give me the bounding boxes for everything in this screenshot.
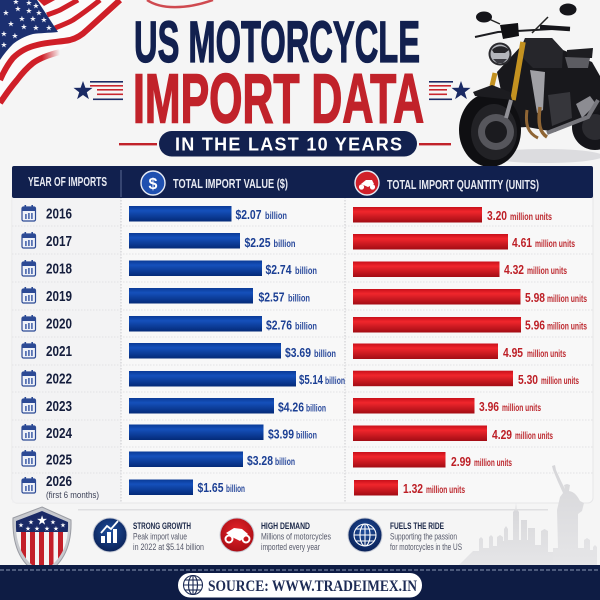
feature: fuels the ride: FUELS THE RIDE bbox=[390, 521, 444, 532]
row 2026: billion bbox=[226, 484, 245, 495]
icon: shield: ★ bbox=[19, 522, 25, 529]
source pill: SOURCE: WWW.TRADEIMEX.IN bbox=[208, 578, 417, 595]
table header: $ bbox=[149, 176, 158, 193]
row 2022 bbox=[22, 370, 579, 388]
skyline and Statue of Liberty bbox=[458, 465, 597, 566]
row 2022: billion bbox=[325, 376, 345, 387]
icon: shield: ★ bbox=[54, 526, 60, 532]
footer band bbox=[0, 565, 600, 600]
row 2026 bbox=[22, 473, 465, 500]
row 2019: billion bbox=[288, 294, 310, 304]
row 2026: (first 6 months) bbox=[46, 490, 99, 500]
table header: YEAR OF IMPORTS bbox=[28, 175, 107, 189]
divider above features bbox=[78, 509, 548, 510]
subtitle pill: IN THE LAST 10 YEARS bbox=[175, 134, 402, 154]
row 2021: million units bbox=[527, 349, 566, 360]
row 2025: 2025 bbox=[46, 452, 72, 468]
row 2016 bbox=[22, 205, 552, 223]
icon: American flag corner: ★ bbox=[3, 9, 10, 17]
feature: high demand: imported every year bbox=[261, 542, 320, 552]
table header: TOTAL IMPORT VALUE ($) bbox=[173, 177, 288, 191]
row 2026: 2026 bbox=[46, 473, 72, 490]
row 2023: 2023 bbox=[46, 398, 72, 415]
feature: strong growth: Peak import value bbox=[133, 532, 187, 542]
row 2021: 4.95 bbox=[503, 346, 523, 360]
row 2024: million units bbox=[515, 431, 553, 442]
icon: shield: ★ bbox=[45, 526, 51, 532]
row 2018 bbox=[22, 260, 567, 278]
row 2020 bbox=[22, 315, 587, 332]
row 2023: $4.26 bbox=[278, 400, 304, 414]
row 2026: million units bbox=[426, 485, 465, 496]
row 2020: 2020 bbox=[46, 316, 72, 332]
row 2019: 2019 bbox=[46, 288, 72, 305]
right star decoration bbox=[429, 81, 470, 100]
row 2016: $2.07 bbox=[236, 207, 262, 222]
icon: shield: ★ bbox=[61, 522, 67, 529]
row 2023: 3.96 bbox=[479, 400, 499, 414]
row 2021 bbox=[22, 342, 566, 360]
icon: American flag corner: ★ bbox=[33, 2, 40, 10]
row 2025: million units bbox=[474, 458, 512, 469]
row 2025: $3.28 bbox=[247, 453, 273, 468]
row 2017: million units bbox=[535, 239, 575, 250]
icon: American flag corner: ★ bbox=[12, 32, 19, 40]
row 2022: 5.30 bbox=[518, 373, 538, 387]
row 2025: 2.99 bbox=[451, 455, 471, 469]
row 2019: 5.98 bbox=[525, 291, 545, 305]
row 2020: $2.76 bbox=[266, 318, 292, 332]
feature: high demand: Millions of motorcycles bbox=[261, 532, 331, 542]
row 2024 bbox=[22, 424, 553, 442]
title line 2: IMPORT DATA bbox=[133, 60, 424, 138]
icon: American flag corner: ★ bbox=[26, 7, 33, 15]
row 2022: $5.14 bbox=[299, 372, 324, 387]
row 2025: billion bbox=[275, 457, 295, 468]
feature: high demand: HIGH DEMAND bbox=[261, 521, 310, 532]
row 2023: billion bbox=[306, 404, 326, 414]
row 2019 bbox=[22, 287, 587, 305]
row 2020: billion bbox=[295, 322, 317, 332]
row 2019: $2.57 bbox=[258, 290, 284, 304]
row 2024: billion bbox=[296, 430, 317, 442]
source pill bbox=[178, 573, 422, 598]
row 2016: billion bbox=[265, 211, 287, 222]
row 2016: million units bbox=[510, 212, 552, 223]
icon: American flag corner: ★ bbox=[15, 5, 22, 13]
feature: strong growth: STRONG GROWTH bbox=[133, 521, 191, 532]
icon: American flag corner: ★ bbox=[41, 16, 48, 24]
icon: American flag corner: ★ bbox=[19, 15, 26, 23]
row 2017 bbox=[22, 232, 575, 250]
icon: shield bbox=[12, 506, 72, 565]
row 2018: billion bbox=[295, 266, 317, 277]
row 2018: 4.32 bbox=[504, 263, 524, 277]
icon: American flag corner bbox=[0, 0, 213, 108]
icon: American flag corner: ★ bbox=[8, 20, 15, 28]
icon: shield: ★ bbox=[26, 526, 32, 532]
feature: fuels the ride: for motorcycles in the US bbox=[390, 542, 462, 552]
row 2021: $3.69 bbox=[285, 345, 311, 360]
row 2018: million units bbox=[527, 266, 567, 277]
row 2024: 2024 bbox=[46, 425, 73, 442]
row 2023 bbox=[22, 397, 541, 415]
table panel bbox=[12, 190, 593, 503]
row 2022: million units bbox=[541, 376, 579, 387]
feature: fuels the ride bbox=[348, 518, 462, 552]
icon: American flag corner: ★ bbox=[36, 9, 43, 17]
icon: American flag corner: ★ bbox=[33, 24, 40, 32]
subtitle pill bbox=[119, 131, 451, 156]
feature: fuels the ride: Supporting the passion bbox=[390, 532, 457, 542]
row 2022: 2022 bbox=[46, 370, 72, 388]
row 2026: 1.32 bbox=[403, 482, 423, 496]
row 2018: $2.74 bbox=[266, 262, 292, 277]
row 2017: 4.61 bbox=[512, 236, 532, 250]
left star decoration bbox=[74, 81, 123, 100]
row 2017: $2.25 bbox=[244, 235, 270, 250]
row 2016: 3.20 bbox=[487, 209, 507, 223]
motorcycle photo bbox=[459, 4, 600, 167]
icon: American flag corner: ★ bbox=[26, 0, 33, 7]
icon: American flag corner: ★ bbox=[1, 30, 8, 38]
row 2021: billion bbox=[314, 349, 336, 360]
row 2016: 2016 bbox=[46, 206, 72, 222]
row 2023: million units bbox=[502, 403, 541, 414]
row 2017: 2017 bbox=[46, 233, 72, 250]
row 2024: $3.99 bbox=[268, 426, 294, 442]
row 2025 bbox=[22, 450, 512, 469]
icon: American flag corner: ★ bbox=[46, 24, 53, 32]
row 2026: $1.65 bbox=[198, 480, 224, 495]
icon: American flag corner: ★ bbox=[30, 15, 37, 23]
icon: shield: ★ bbox=[35, 526, 41, 532]
icon: American flag corner: ★ bbox=[21, 23, 28, 31]
feature: strong growth: in 2022 at $5.14 billion bbox=[133, 542, 204, 552]
icon: shield: ★ bbox=[37, 515, 47, 527]
row 2020: 5.96 bbox=[525, 318, 545, 332]
feature: strong growth bbox=[93, 518, 204, 552]
row 2017: billion bbox=[274, 239, 296, 250]
icon: shield: ★ bbox=[29, 519, 35, 526]
row 2024: 4.29 bbox=[492, 428, 512, 442]
row 2021: 2021 bbox=[46, 343, 72, 360]
table header: TOTAL IMPORT QUANTITY (UNITS) bbox=[387, 178, 539, 192]
table header bbox=[12, 166, 593, 198]
row 2018: 2018 bbox=[46, 260, 72, 278]
feature: high demand bbox=[220, 518, 331, 552]
icon: shield: ★ bbox=[51, 519, 57, 526]
icon: American flag corner: ★ bbox=[1, 41, 8, 49]
